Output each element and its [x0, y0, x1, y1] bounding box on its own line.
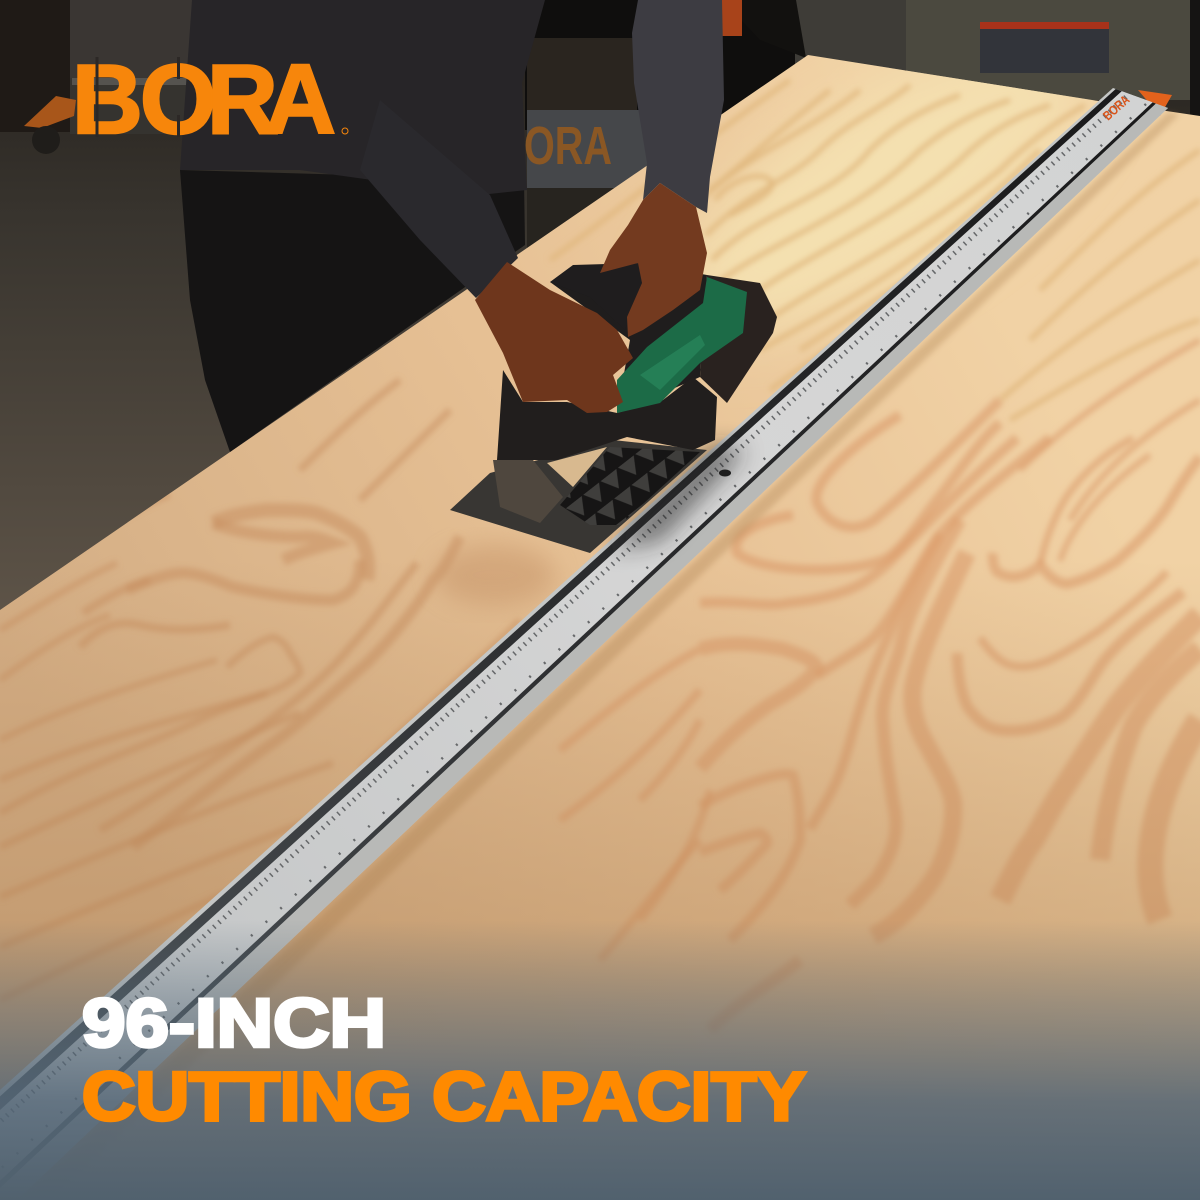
orange clamp behind sleeve: [722, 0, 742, 36]
worker: right hand: [600, 183, 707, 337]
handle: [550, 263, 642, 330]
battery: [700, 275, 777, 403]
rail hole: [719, 470, 731, 476]
saw base plate: [450, 440, 707, 553]
dark grain patch below saw: [435, 545, 555, 605]
machine with faded brand behind worker: [524, 110, 652, 248]
worker: left hand: [475, 262, 633, 413]
worker: trousers: [180, 170, 525, 452]
headline line 2: CUTTING CAPACITY: [82, 1058, 806, 1135]
wood gap under saw: [547, 447, 607, 487]
wood grain right side: [560, 340, 1200, 1030]
machine with faded brand behind worker: ORA: [524, 116, 612, 176]
blade guard: [493, 460, 563, 523]
green housing: [617, 277, 747, 413]
bottom gradient overlay: [0, 920, 1200, 1200]
machine label on far wall: [980, 22, 1109, 73]
headline line 1: 96-INCH: [82, 984, 386, 1062]
saw backing mass: [550, 263, 707, 413]
wood grain left side: [0, 378, 521, 958]
logo: BORA: BORA: [72, 44, 336, 154]
saw shadow on rail: [610, 445, 745, 550]
wood grain upper sheet: [550, 80, 1200, 420]
saw body: [497, 370, 717, 460]
orange end cap: [1138, 90, 1172, 116]
orange cart with wheel: [24, 78, 188, 154]
circular saw: [450, 263, 777, 553]
rail brand mark: BORA: [1100, 92, 1133, 123]
background: workshop floor and wall: [0, 0, 1200, 620]
pale yellow upper wood: [700, 64, 1098, 336]
lower wood shading: [0, 667, 1200, 1077]
worker: sweater torso and arms: [180, 0, 724, 298]
